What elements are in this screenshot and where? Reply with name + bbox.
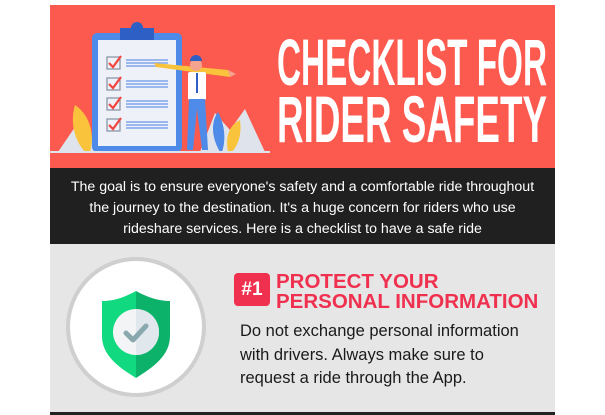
- panel: intro text: [50, 168, 555, 244]
- heading: [276, 270, 538, 313]
- illustration: clipboard and man: [50, 22, 270, 153]
- body text: request a ride through the App.: [240, 369, 467, 387]
- badge: #1: [234, 273, 270, 306]
- body text: with drivers. Always make sure to: [240, 346, 484, 364]
- title: [277, 30, 547, 155]
- panel: tip 1: [50, 244, 555, 415]
- icon: shield in circle: [66, 257, 206, 397]
- panel: intro text: the journey to the destination. It's a huge concern for riders who use: [89, 200, 516, 216]
- heading: PERSONAL INFORMATION: [276, 290, 538, 313]
- panel: intro text: The goal is to ensure everyone's safety and a comfortable ride throughout: [71, 179, 534, 195]
- body text: [240, 322, 519, 387]
- body text: Do not exchange personal information: [240, 322, 519, 340]
- heading: PROTECT YOUR: [276, 270, 438, 293]
- badge: #1: #1: [241, 279, 263, 300]
- panel: intro text: rideshare services. Here is a checklist to have a safe ride: [123, 221, 482, 237]
- panel: header: [50, 5, 555, 168]
